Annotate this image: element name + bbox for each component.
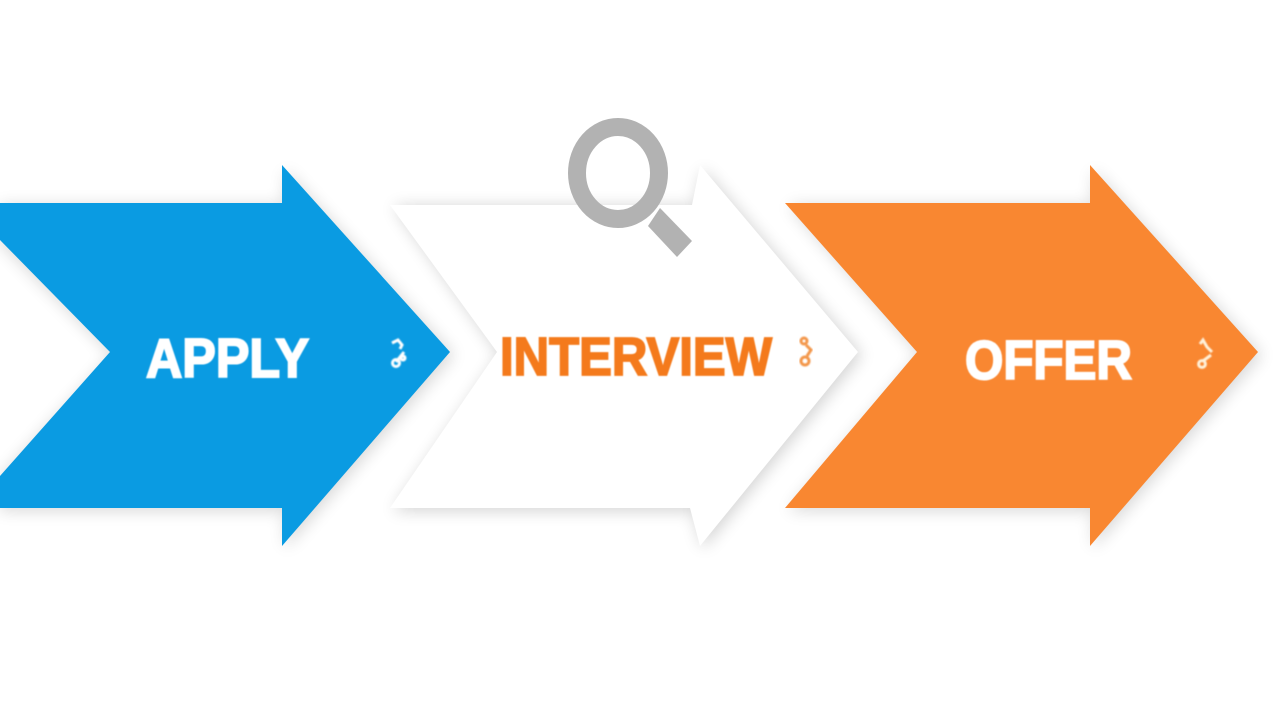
label: offer: OFFER (965, 329, 1132, 391)
arrow: interview step (390, 165, 862, 549)
icon: small white arrow glyph (801, 338, 811, 365)
icon: magnifying glass (577, 127, 692, 257)
label: interview: INTERVIEW (500, 327, 772, 387)
arrow: apply step (0, 165, 454, 549)
icon: small blue arrow glyph (392, 340, 405, 366)
label: apply: APPLY (146, 327, 309, 389)
arrow: offer step (785, 165, 1262, 549)
icon: small orange arrow glyph (1199, 340, 1212, 367)
